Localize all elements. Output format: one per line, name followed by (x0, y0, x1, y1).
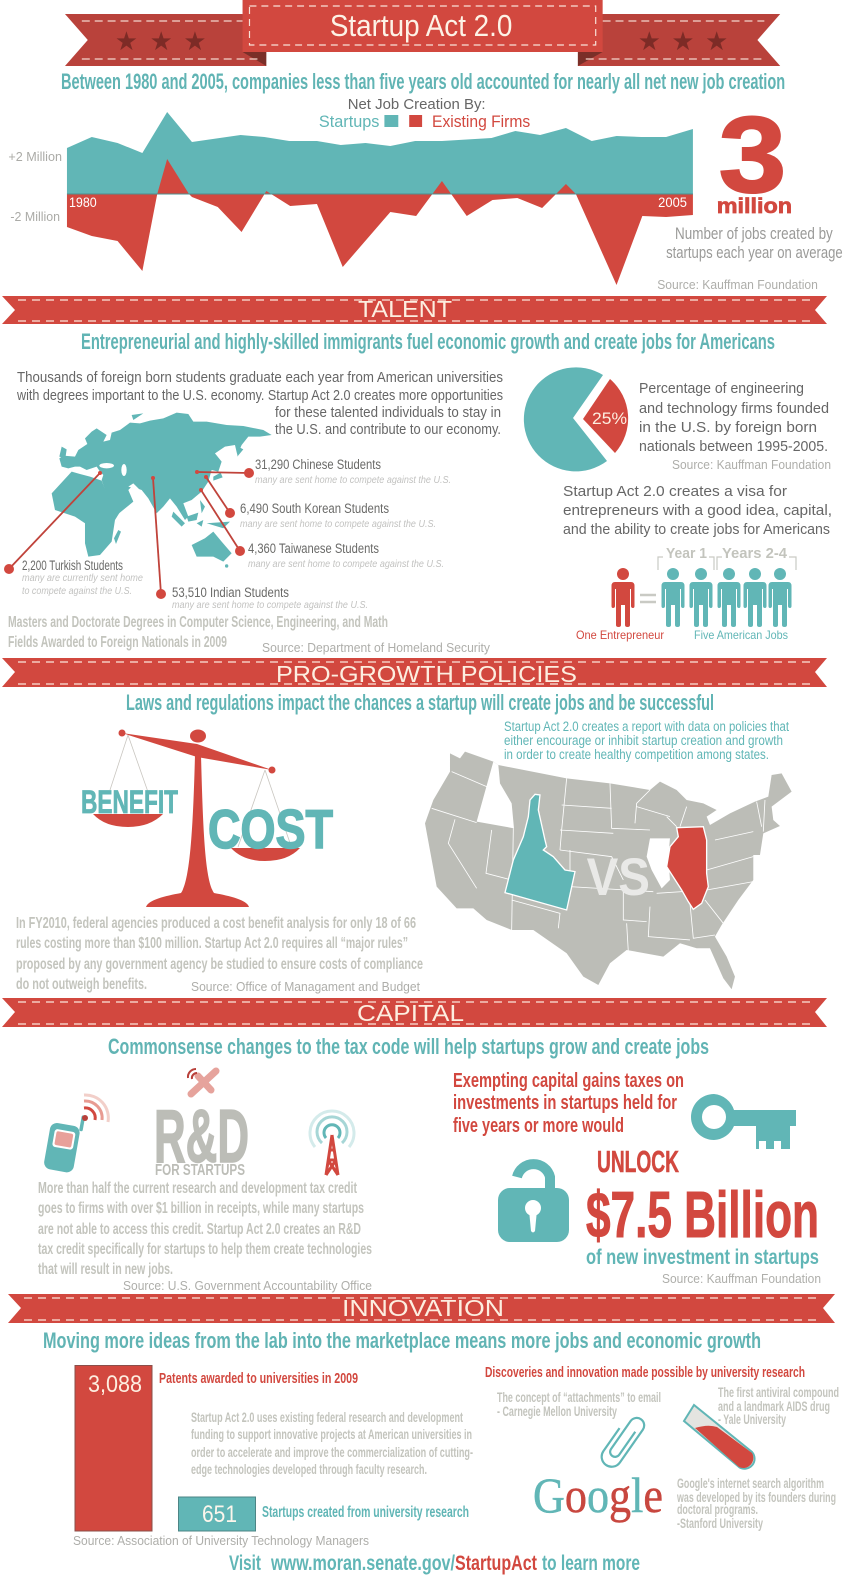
call to action: to learn more (542, 1552, 640, 1575)
banner: pro-growth policies: PRO-GROWTH POLICIES (276, 661, 577, 687)
source: omb: Source: Office of Managament and Budget (191, 980, 421, 994)
axis labels: 2005 (658, 194, 687, 210)
icon: one entrepreneur (576, 568, 664, 642)
text: engineering firms: Percentage of engineering (639, 380, 804, 397)
icon: cell phone (43, 1095, 108, 1174)
text: foreign born students: for these talented individuals to stay in (275, 405, 501, 421)
icon: balance scale (81, 730, 333, 907)
banner: talent (2, 296, 827, 324)
icon: open padlock (498, 1164, 569, 1242)
label: Turkish students: many are currently sent home (22, 572, 143, 584)
bar: startups (178, 1497, 469, 1531)
label: Indian students (172, 585, 368, 611)
axis labels: 1980 (69, 194, 97, 210)
banner: innovation: INNOVATION (342, 1295, 504, 1321)
axis labels: +2 Million (8, 149, 62, 164)
label: Taiwanese students (248, 541, 444, 570)
label: South Korean students: many are sent home to compete against the U.S. (240, 518, 436, 530)
title: Startup Act 2.0 (330, 8, 512, 43)
right ribbon (578, 14, 780, 66)
text: cost benefit analysis (16, 915, 423, 993)
icon: stars: ★ (150, 28, 173, 56)
text: engineering firms: Source: Kauffman Foundation (672, 458, 831, 472)
text: attachments: - Carnegie Mellon University (497, 1404, 617, 1419)
bar: patents: 3,088 (88, 1371, 142, 1398)
banner: innovation (8, 1294, 835, 1323)
text: search algorithm (676, 1476, 836, 1531)
text: r&d tax credit: goes to firms with over $1 billion in receipts, while many startups (38, 1200, 364, 1217)
label: Indian students: many are sent home to compete against the U.S. (172, 599, 368, 611)
text: visa: Startup Act 2.0 creates a visa for (563, 483, 787, 500)
label: Turkish students: to compete against the U.S. (22, 585, 132, 597)
text: r&d tax credit: are not able to access this credit. Startup Act 2.0 creates an R&D (38, 1221, 361, 1238)
bar: patents: Patents awarded to universities in 2009 (159, 1370, 358, 1387)
bar: startups: Startups created from university research (262, 1504, 469, 1521)
text: university funding: edge technologies developed through faculty research. (191, 1462, 427, 1477)
pie chart: 25% (524, 367, 628, 471)
map caption: Masters and Doctorate Degrees in Computer Science, Engineering, and Math (8, 614, 388, 631)
chart legend: Startups (319, 112, 379, 131)
label: Indian students: 53,510 Indian Students (172, 585, 289, 600)
map callouts (4, 468, 254, 599)
state: illinois (667, 827, 708, 909)
icon: stars: ★ (638, 28, 661, 56)
text: engineering firms (639, 380, 831, 472)
text: r&d tax credit: More than half the current research and development tax credit (38, 1180, 357, 1197)
source: kauffman: Source: Kauffman Foundation (662, 1272, 821, 1286)
text: engineering firms: nationals between 1995-2005. (639, 438, 828, 455)
top section: title and job creation chart (8, 0, 843, 292)
source: autm: Source: Association of University Technology Managers (73, 1534, 369, 1548)
year brackets: Year 1 (666, 545, 707, 562)
text: r&d tax credit: tax credit specifically for startups to help them create technologies (38, 1241, 372, 1258)
year brackets (658, 545, 796, 570)
text: state report (504, 719, 789, 762)
label: benefit: BENEFIT (81, 784, 178, 820)
text: antiviral (718, 1385, 839, 1427)
icon: stars: ★ (671, 28, 695, 56)
call to action: www.moran.senate.gov/ (270, 1552, 455, 1575)
text: university funding: order to accelerate and improve the commercialization of cutting- (191, 1445, 473, 1460)
text: engineering firms: in the U.S. by foreign born (639, 419, 817, 436)
text: cost benefit analysis: rules costing more than $100 million. Startup Act 2.0 requires all “major rules” (16, 935, 408, 952)
source: homeland security: Source: Department of Homeland Security (262, 641, 491, 655)
stat: 3 million: Source: Kauffman Foundation (657, 278, 818, 292)
state: idaho (505, 794, 575, 910)
stat: 3 million: million (717, 195, 792, 218)
text: cost benefit analysis: do not outweigh benefits. (16, 976, 147, 993)
equals sign (640, 595, 656, 602)
text: search algorithm: doctoral programs. (677, 1502, 758, 1517)
text: state report: in order to create healthy competition among states. (504, 747, 769, 762)
icon: one entrepreneur: One Entrepreneur (576, 628, 664, 642)
heading: r&d for startups: FOR STARTUPS (155, 1162, 245, 1179)
icon: key (691, 1094, 796, 1149)
text: r&d tax credit: that will result in new jobs. (38, 1261, 173, 1278)
call to action: StartupAct (455, 1552, 537, 1575)
text: capital gains: five years or more would (453, 1115, 624, 1137)
axis labels: -2 Million (10, 209, 60, 224)
text: foreign born students (16, 370, 503, 438)
call to action: Visit (229, 1552, 261, 1575)
bar: patents (75, 1366, 358, 1531)
chart legend: Existing Firms (432, 112, 530, 131)
text: antiviral: - Yale University (718, 1412, 786, 1427)
icon: stars: ★ (115, 28, 138, 56)
icon: five american jobs (662, 568, 792, 642)
title banner (65, 0, 780, 66)
icon: stars (638, 28, 728, 56)
source: gao: Source: U.S. Government Accountability Office (123, 1279, 372, 1293)
icon: stars: ★ (705, 28, 728, 56)
icon: five american jobs: Five American Jobs (694, 628, 788, 642)
left ribbon (65, 14, 266, 66)
text: visa (563, 483, 832, 538)
axis labels (8, 149, 687, 224)
heading: r&d for startups (154, 1094, 249, 1179)
label: vs: VS (587, 848, 650, 907)
icon: paperclip (598, 1412, 647, 1471)
text: search algorithm: -Stanford University (677, 1516, 763, 1531)
icon: test tube (684, 1405, 755, 1469)
us map (425, 752, 792, 989)
label: South Korean students: 6,490 South Korean Students (240, 501, 389, 516)
text: visa: entrepreneurs with a good idea, capital, (563, 502, 832, 519)
google logo: Google (533, 1467, 663, 1523)
call to action (229, 1552, 640, 1575)
text: university funding: Startup Act 2.0 uses existing federal research and development (191, 1410, 463, 1425)
map caption (8, 614, 388, 651)
icon: stars: ★ (183, 28, 206, 56)
chart legend (319, 96, 530, 131)
banner: capital: CAPITAL (357, 1000, 464, 1026)
bar: startups: 651 (202, 1501, 237, 1528)
text: attachments (497, 1390, 661, 1419)
map caption: Fields Awarded to Foreign Nationals in 2009 (8, 634, 227, 651)
text: capital gains (453, 1070, 684, 1137)
text: capital gains: investments in startups held for (453, 1092, 677, 1114)
text: state report: Startup Act 2.0 creates a report with data on policies that (504, 719, 789, 734)
text: university funding (191, 1410, 473, 1477)
year brackets: Years 2-4 (722, 545, 788, 562)
label: Chinese students (255, 457, 451, 486)
icon: radio tower (310, 1111, 354, 1175)
area chart: net job creation (8, 112, 693, 285)
pie chart: 25%: 25% (592, 409, 627, 428)
stat: 3 million (657, 95, 843, 292)
label: Taiwanese students: many are sent home to compete against the U.S. (248, 558, 444, 570)
text: state report: either encourage or inhibit startup creation and growth (504, 733, 783, 748)
label: Chinese students: many are sent home to compete against the U.S. (255, 474, 451, 486)
label: Taiwanese students: 4,360 Taiwanese Students (248, 541, 379, 556)
icon: satellite (188, 1069, 216, 1094)
label: Turkish students: 2,200 Turkish Students (22, 558, 123, 573)
text: r&d tax credit (38, 1180, 372, 1278)
text: cost benefit analysis: In FY2010, federal agencies produced a cost benefit analysis for only 18 of 66 (16, 915, 416, 932)
text: cost benefit analysis: proposed by any government agency be studied to ensure costs of compliance (16, 956, 423, 973)
text: capital gains: Exempting capital gains taxes on (453, 1070, 684, 1092)
text: engineering firms: and technology firms founded (639, 400, 829, 417)
text: foreign born students: Thousands of foreign born students graduate each year from American universities (17, 370, 503, 386)
icon: stars (115, 28, 206, 56)
text: attachments: The concept of “attachments” to email (497, 1390, 661, 1405)
stat: unlock $7.5 billion: UNLOCK (597, 1144, 679, 1179)
text: visa: and the ability to create jobs for Americans (563, 521, 830, 538)
text: university funding: funding to support innovative projects at American universities in (191, 1427, 472, 1442)
banner: pro-growth policies (2, 658, 827, 687)
stat: 3 million: 3 (719, 95, 786, 215)
text: foreign born students: the U.S. and contribute to our economy. (275, 422, 501, 438)
label: cost: COST (208, 798, 333, 860)
banner: capital (2, 998, 827, 1027)
chart legend: Net Job Creation By: (348, 96, 486, 113)
world map (52, 413, 272, 568)
label: Turkish students (22, 558, 143, 597)
banner: talent: TALENT (358, 296, 452, 322)
label: South Korean students (240, 501, 436, 530)
text: foreign born students: with degrees important to the U.S. economy. Startup Act 2.0 creates more opportunities (16, 388, 503, 404)
heading: r&d for startups: R&D (154, 1094, 249, 1178)
label: Chinese students: 31,290 Chinese Students (255, 457, 381, 472)
stat: unlock $7.5 billion (586, 1144, 819, 1269)
